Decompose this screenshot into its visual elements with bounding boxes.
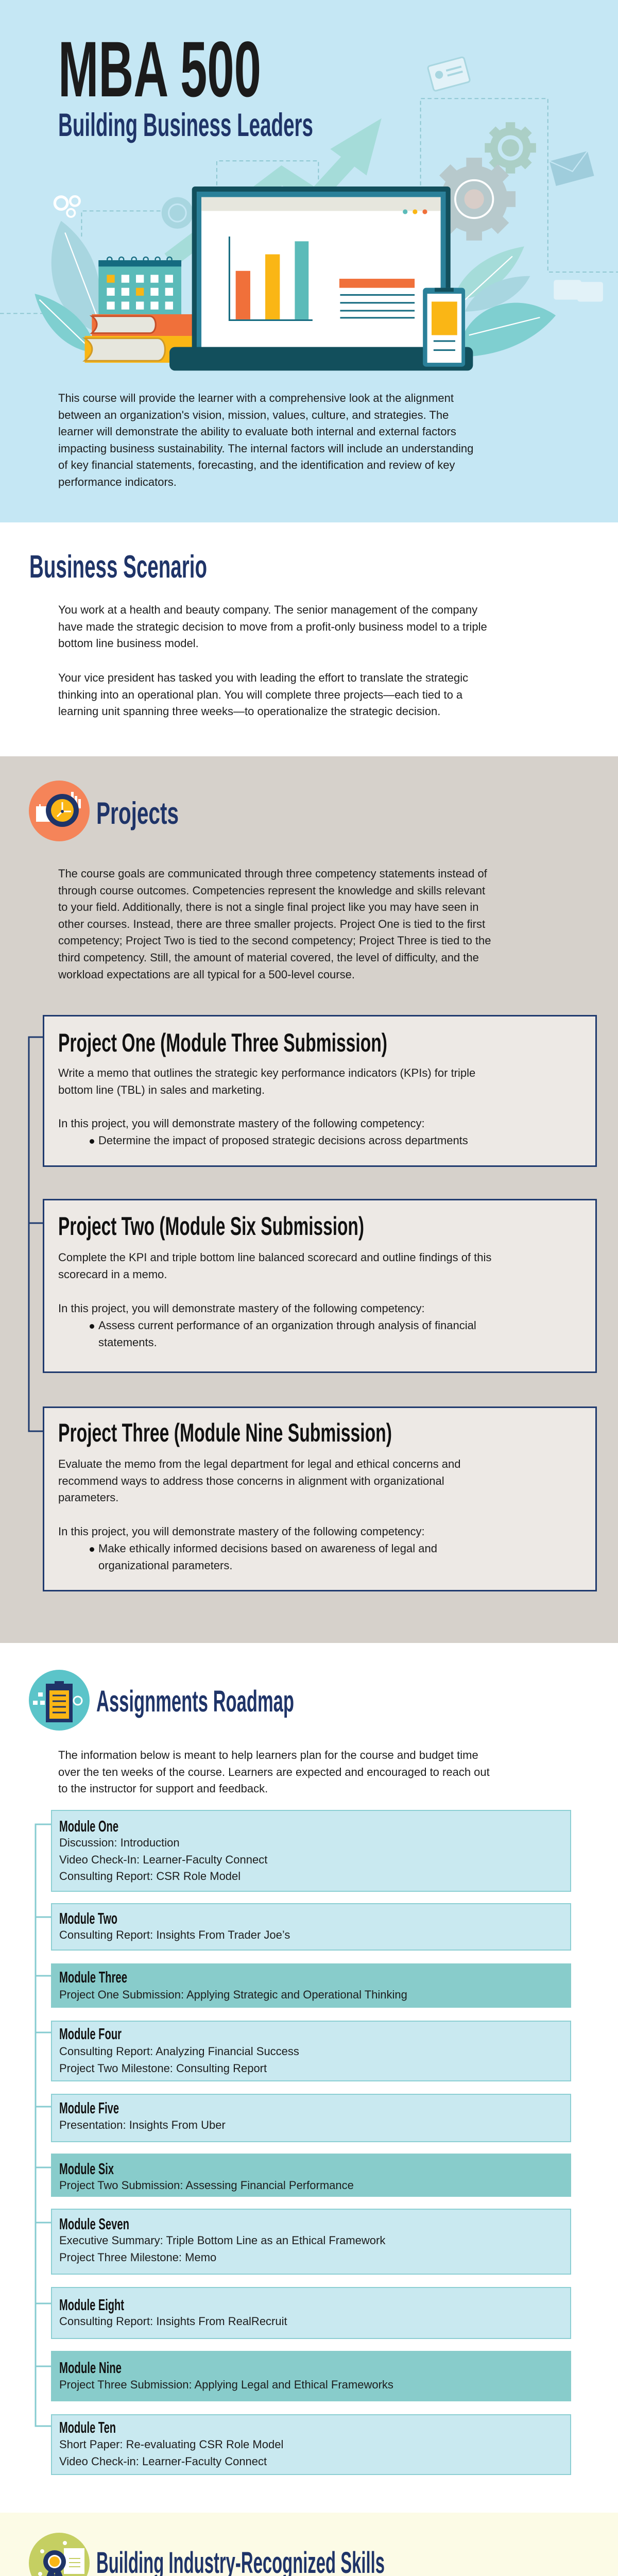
projects intro text: The course goals are communicated through three competency statements instead of	[58, 867, 487, 880]
module two	[51, 1903, 571, 1951]
module three items: Project One Submission: Applying Strategic and Operational Thinking	[59, 1988, 407, 2001]
icon: gears	[55, 122, 536, 241]
roadmap intro text: to the instructor for support and feedback.	[58, 1782, 268, 1795]
project three bullet	[98, 1540, 437, 1574]
module one items: Video Check-In: Learner-Faculty Connect	[59, 1853, 267, 1866]
project three text: Evaluate the memo from the legal department for legal and ethical concerns and	[58, 1458, 460, 1470]
panel: project one	[43, 1015, 597, 1167]
project three bullet: organizational parameters.	[98, 1559, 232, 1572]
module four items: Project Two Milestone: Consulting Report	[59, 2062, 267, 2075]
projects section background	[0, 756, 618, 1643]
project two bullet: statements.	[98, 1336, 157, 1349]
hero background	[0, 0, 618, 522]
title: MBA 500	[58, 25, 261, 113]
panel: project two	[43, 1199, 597, 1373]
project three text: recommend ways to address those concerns in alignment with organizational	[58, 1475, 444, 1487]
module nine	[51, 2351, 571, 2401]
project two bullet: Assess current performance of an organization through analysis of financial	[98, 1319, 476, 1332]
module six title: Module Six	[59, 2160, 114, 2178]
icon: skills badge	[29, 2533, 90, 2576]
heading: Business Scenario: Business Scenario	[29, 549, 207, 585]
intro text: impacting business sustainability. The internal factors will include an understanding	[58, 442, 473, 455]
module six	[51, 2154, 571, 2197]
project three competency: In this project, you will demonstrate mastery of the following competency:	[58, 1525, 425, 1538]
module ten items: Short Paper: Re-evaluating CSR Role Model	[59, 2438, 283, 2451]
module two title: Module Two	[59, 1909, 117, 1927]
projects intro text	[58, 867, 491, 981]
projects connector	[28, 1037, 43, 1432]
business scenario text: bottom line business model.	[58, 637, 199, 650]
icon: books	[85, 314, 192, 363]
subtitle: Building Business Leaders	[58, 107, 313, 143]
business scenario text 2: learning unit spanning three weeks—to operationalize the strategic decision.	[58, 705, 440, 718]
roadmap connector	[35, 1824, 51, 2427]
module seven items	[59, 2234, 385, 2264]
module one	[51, 1810, 571, 1892]
project two text: scorecard in a memo.	[58, 1268, 167, 1281]
module five items: Presentation: Insights From Uber	[59, 2119, 226, 2131]
intro text: between an organization's vision, mission, values, culture, and strategies. The	[58, 409, 449, 421]
module eight title: Module Eight	[59, 2296, 124, 2314]
icon: id card	[427, 57, 470, 91]
business scenario text 2: thinking into an operational plan. You will complete three projects—each tied to a	[58, 688, 462, 701]
skills section background	[0, 2513, 618, 2576]
module seven items: Executive Summary: Triple Bottom Line as an Ethical Framework	[59, 2234, 385, 2247]
icon: chat bubbles	[554, 280, 603, 301]
project three text	[58, 1458, 460, 1504]
project one text	[58, 1066, 475, 1096]
module ten title: Module Ten	[59, 2418, 116, 2436]
project three text: parameters.	[58, 1491, 118, 1504]
module seven items: Project Three Milestone: Memo	[59, 2251, 216, 2264]
leaves	[35, 221, 556, 357]
module ten items	[59, 2438, 283, 2468]
icon: envelope	[550, 151, 594, 186]
heading: Assignments Roadmap: Assignments Roadmap	[96, 1685, 294, 1718]
project one competency: In this project, you will demonstrate mastery of the following competency:	[58, 1117, 425, 1130]
module four items: Consulting Report: Analyzing Financial Success	[59, 2045, 299, 2058]
project one bullet: Determine the impact of proposed strategic decisions across departments	[98, 1134, 468, 1147]
business scenario text: You work at a health and beauty company. The senior management of the company	[58, 603, 477, 616]
module four	[51, 2021, 571, 2081]
projects intro text: competency; Project Two is tied to the second competency; Project Three is tied to the	[58, 934, 491, 947]
module six items: Project Two Submission: Assessing Financial Performance	[59, 2179, 354, 2192]
panel: project three	[43, 1406, 597, 1591]
module three	[51, 1963, 571, 2008]
heading: Projects: Projects	[96, 796, 179, 831]
icon: phone	[423, 288, 465, 367]
project two text: Complete the KPI and triple bottom line balanced scorecard and outline findings of this	[58, 1251, 491, 1264]
icon: calendar	[98, 257, 181, 319]
intro text	[58, 392, 473, 488]
module ten items: Video Check-in: Learner-Faculty Connect	[59, 2455, 267, 2468]
module one items	[59, 1836, 268, 1883]
business scenario text 2: Your vice president has tasked you with leading the effort to translate the strategic	[58, 671, 468, 684]
roadmap intro text: over the ten weeks of the course. Learners are expected and encouraged to reach out	[58, 1766, 490, 1778]
module one title: Module One	[59, 1817, 118, 1835]
module three title: Module Three	[59, 1968, 127, 1986]
module ten	[51, 2414, 571, 2475]
icon: growth arrow	[169, 118, 382, 260]
projects intro text: to your field. Additionally, there is not a single final project like you may have seen in	[58, 901, 479, 913]
projects intro text: workload expectations are all typical for a 500-level course.	[58, 968, 355, 981]
projects intro text: through course outcomes. Competencies represent the knowledge and skills relevant	[58, 884, 485, 897]
module one items: Discussion: Introduction	[59, 1836, 180, 1849]
intro text: This course will provide the learner with a comprehensive look at the alignment	[58, 392, 454, 404]
project one text: bottom line (TBL) in sales and marketing.	[58, 1083, 265, 1096]
roadmap intro text	[58, 1749, 490, 1795]
project one text: Write a memo that outlines the strategic key performance indicators (KPIs) for triple	[58, 1066, 475, 1079]
business scenario text 2	[58, 671, 468, 718]
project three bullet: Make ethically informed decisions based on awareness of legal and	[98, 1542, 437, 1555]
module five	[51, 2094, 571, 2142]
business scenario text	[58, 603, 487, 650]
module two items: Consulting Report: Insights From Trader Joe’s	[59, 1928, 290, 1941]
project two text	[58, 1251, 491, 1281]
module four title: Module Four	[59, 2025, 122, 2043]
module eight items: Consulting Report: Insights From RealRecruit	[59, 2315, 287, 2328]
icon: projects clock	[29, 781, 90, 841]
module seven title: Module Seven	[59, 2215, 129, 2233]
projects intro text: other courses. Instead, there are three smaller projects. Project One is tied to the first	[58, 918, 485, 930]
projects intro text: third competency. Still, the amount of material covered, the level of difficulty, and the	[58, 951, 479, 964]
hero illustration	[0, 57, 618, 371]
icon: roadmap clipboard	[29, 1670, 90, 1731]
project two title: Project Two (Module Six Submission)	[58, 1212, 364, 1241]
icon: laptop	[169, 187, 473, 370]
business scenario text: have made the strategic decision to move from a profit-only business model to a triple	[58, 620, 487, 633]
intro text: performance indicators.	[58, 476, 177, 488]
module four items	[59, 2045, 299, 2075]
module five title: Module Five	[59, 2099, 119, 2117]
module one items: Consulting Report: CSR Role Model	[59, 1870, 241, 1883]
project one title: Project One (Module Three Submission)	[58, 1028, 387, 1057]
module nine title: Module Nine	[59, 2359, 122, 2377]
module seven	[51, 2209, 571, 2275]
intro text: of key financial statements, forecasting, and the identification and review of key	[58, 459, 455, 471]
intro text: learner will demonstrate the ability to evaluate both internal and external factors	[58, 425, 456, 438]
module eight	[51, 2287, 571, 2339]
roadmap intro text: The information below is meant to help learners plan for the course and budget time	[58, 1749, 478, 1761]
project three title: Project Three (Module Nine Submission)	[58, 1418, 392, 1447]
project two competency: In this project, you will demonstrate mastery of the following competency:	[58, 1302, 425, 1315]
project two bullet	[98, 1317, 476, 1351]
module nine items: Project Three Submission: Applying Legal and Ethical Frameworks	[59, 2378, 393, 2391]
